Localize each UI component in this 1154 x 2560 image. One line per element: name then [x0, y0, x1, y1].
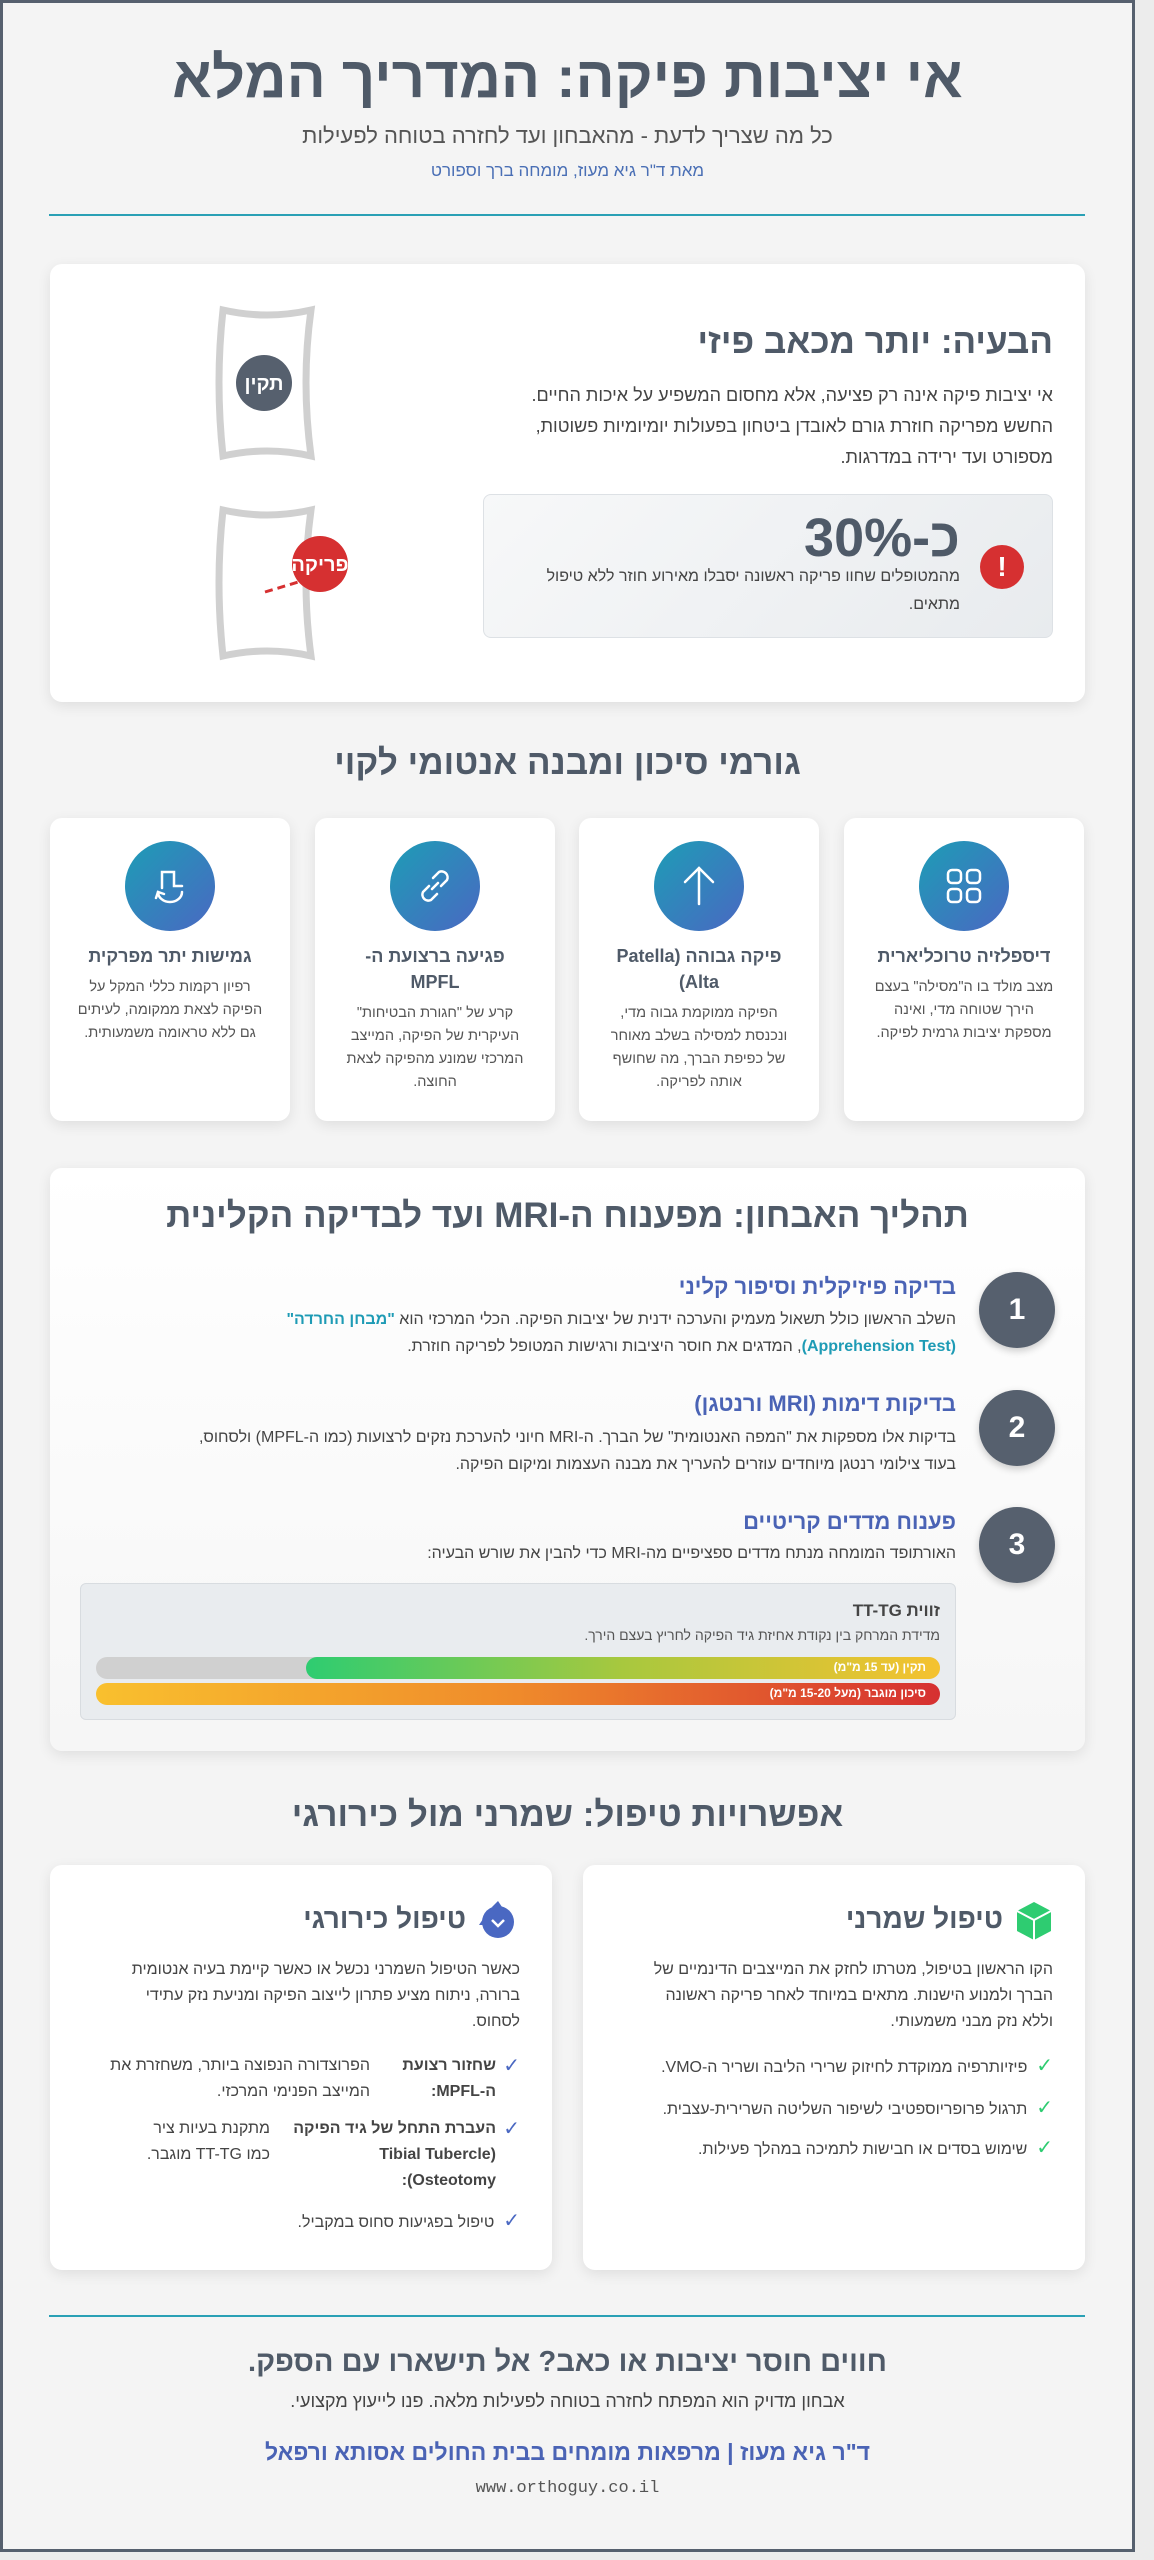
surgical text	[132, 1961, 520, 2030]
surgical list: Osteotomy):	[402, 2172, 496, 2189]
icon: arrow up	[654, 841, 744, 931]
CTA text: אבחון מדויק הוא המפתח לחזרה בטוחה לפעילות מלאה. פנו לייעוץ מקצועי.	[290, 2391, 845, 2411]
icon: green cube	[1017, 1902, 1051, 1940]
conservative heading: טיפול שמרני	[846, 1903, 1003, 1934]
panel: surgical	[50, 1865, 552, 2270]
problem text	[531, 385, 1053, 467]
step 3	[427, 1506, 1058, 1590]
surgical list: שחזור רצועת	[402, 2057, 496, 2074]
conservative text: הברך ולמנוע הישנות. מתאים במיוחד לאחר פריקה ראשונה	[666, 1987, 1053, 2004]
icon: blue badge	[479, 1901, 514, 1938]
surgical list: העברת התחל של גיד הפיקה	[293, 2120, 496, 2137]
stat description: מהמטופלים שחוו פריקה ראשונה יסבלו מאירוע חוזר ללא טיפול מתאים.	[547, 568, 960, 613]
surgical text: לסחוס.	[472, 2013, 520, 2030]
problem text: מספורט ועד ירידה במדרגות.	[840, 447, 1053, 467]
panel: patella alta: הפיקה ממוקמת גבוה מדי, ונכנסת למסילה בשלב מאוחר של כפיפת הברך, מה שחושף אותה לפריקה.	[611, 1005, 787, 1090]
panel: trochlear dysplasia: דיספלזיה טרוכליארית	[878, 946, 1050, 966]
bar: normal	[96, 1657, 940, 1679]
website: www.orthoguy.co.il	[476, 2479, 659, 2498]
checklist: ✓ תרגול פרופריוספטיבי לשיפור השליטה השרירית-עצבית.	[663, 2097, 1053, 2119]
panel: trochlear dysplasia	[844, 818, 1084, 1121]
icon: knee diagrams	[216, 306, 349, 660]
problem text: החשש מפריקה חוזרת גורם לאובדן ביטחון בפעולות יומיומיות פשוטות,	[536, 416, 1053, 436]
problem heading: הבעיה: יותר מכאב פיזי	[697, 322, 1053, 361]
step 3 title: פענוח מדדים קריטיים	[743, 1509, 956, 1534]
subtitle: כל מה שצריך לדעת - מהאבחון ועד לחזרה בטוחה לפעילות	[302, 123, 833, 148]
surgical list: ✓	[503, 2118, 520, 2140]
panel: MPFL	[315, 818, 555, 1121]
step number 2: 2	[1009, 1411, 1025, 1444]
diagnosis heading: תהליך האבחון: מפענוח ה-MRI ועד לבדיקה הקלינית	[166, 1196, 969, 1235]
surgical text: כאשר הטיפול השמרני נכשל או כאשר קיימת בעיה אנטומית	[132, 1961, 520, 1978]
icon: alert	[980, 545, 1024, 589]
checklist: ✓ שימוש בסדים או חבישות לתמיכה במהלך פעילות.	[698, 2137, 1053, 2159]
step 1 text: השלב הראשון כולל תשאול מעמיק והערכה ידנית של יציבות הפיקה. הכלי המרכזי הוא "מבחן החרדה" (Apprehension Test), המדגים את חוסר היציבות ורגישות המטופל לפריקה חוזרת.	[286, 1311, 956, 1355]
surgical text: ברורה, ניתוח מציע פתרון לייצוב הפיקה ומניעת נזק עתידי	[146, 1987, 520, 2004]
step 2 title: בדיקות דימות (MRI ורנטגן)	[694, 1391, 956, 1416]
surgical list: ✓	[503, 2055, 520, 2077]
chart: TT-TG	[80, 1583, 956, 1720]
surgical list: (Tibial Tubercle	[379, 2146, 496, 2163]
panel: diagnosis	[50, 1168, 1085, 1751]
step 3 text: האורתופד המומחה מנתח מדדים ספציפיים מה-MRI כדי להבין את שורש הבעיה:	[427, 1545, 956, 1562]
stat number: כ-30%	[804, 508, 960, 568]
panel: hypermobility: רפיון רקמות כללי המקל על הפיקה לצאת ממקומה, לעיתים גם ללא טראומה משמעותית.	[78, 979, 262, 1041]
author line: מאת ד"ר גיא מעוז, מומחה ברך וספורט	[431, 161, 704, 180]
icon: grid	[919, 841, 1009, 931]
checklist: ✓ פיזיותרפיה ממוקדת לחיזוק שרירי הליבה ושריר ה-VMO.	[661, 2055, 1053, 2077]
icon: link	[390, 841, 480, 931]
conservative text: הקו הראשון בטיפול, מטרתו לחזק את המייצבים הדינמיים של	[654, 1961, 1053, 1978]
TT-TG label: זווית TT-TG	[853, 1601, 940, 1620]
step 1	[286, 1272, 1058, 1355]
panel: problem	[50, 264, 1085, 702]
checklist	[661, 2055, 1053, 2159]
surgical list: הפרוצדורה הנפוצה ביותר, משחזרת את	[110, 2057, 370, 2074]
heading: risk factors: גורמי סיכון ומבנה אנטומי לקוי	[334, 743, 801, 782]
panel: MPFL: פגיעה ברצועת ה-	[365, 946, 505, 966]
panel: hypermobility: גמישות יתר מפרקית	[88, 946, 252, 966]
icon: knee diagrams: פריקה	[291, 554, 349, 576]
problem text: אי יציבות פיקה אינה רק פציעה, אלא מחסום המשפיע על איכות החיים.	[531, 385, 1053, 405]
bar: normal: תקין (עד 15 מ"מ)	[834, 1660, 926, 1674]
stat callout	[483, 494, 1053, 638]
CTA heading: חווים חוסר יציבות או כאב? אל תישארו עם הספק.	[248, 2346, 887, 2378]
surgical list	[110, 2055, 520, 2232]
panel: MPFL: קרע של "חגורת הבטיחות" העיקרית של הפיקה, המייצב המרכזי שמונע מהפיקה לצאת החוצה.	[347, 1005, 523, 1090]
panel: MPFL: MPFL	[410, 972, 460, 992]
panel: trochlear dysplasia: מצב מולד בו ה"מסילה" בעצם הירך שטוחה מדי, ואינה מספקת יציבות גרמית לפיקה.	[875, 979, 1053, 1041]
step 1 title: בדיקה פיזיקלית וסיפור קליני	[679, 1274, 956, 1299]
surgical list: ✓ טיפול בפגיעות סחוס במקביל.	[298, 2210, 520, 2232]
step number 3	[979, 1507, 1055, 1583]
panel: patella alta	[579, 818, 819, 1121]
step 2	[199, 1390, 1058, 1473]
surgical list: ה-MPFL:	[431, 2083, 496, 2100]
surgical list: המייצב הפנימי המרכזי.	[217, 2083, 370, 2100]
heading: treatment: אפשרויות טיפול: שמרני מול כירורגי	[292, 1795, 843, 1834]
icon: knee diagrams: תקין	[244, 373, 284, 395]
contact line: ד"ר גיא מעוז | מרפאות מומחים בבית החולים אסותא ורפאל	[265, 2439, 870, 2465]
panel: conservative	[583, 1865, 1085, 2270]
surgical heading: טיפול כירורגי	[303, 1903, 466, 1934]
panel: patella alta: פיקה גבוהה (Patella	[616, 946, 782, 966]
step number 1: 1	[1009, 1293, 1025, 1326]
surgical list: מתקנת בעיות ציר	[153, 2120, 270, 2137]
step number 3: 3	[1009, 1528, 1025, 1561]
step number 1	[979, 1272, 1055, 1348]
bar: risk: סיכון מוגבר (מעל 15-20 מ"מ)	[770, 1686, 926, 1700]
bar: risk	[96, 1683, 940, 1705]
conservative text: וללא נזק מבני משמעותי.	[890, 2013, 1053, 2030]
panel: hypermobility	[50, 818, 290, 1121]
step 2 text: בדיקות אלו מספקות את "המפה האנטומית" של הברך. ה-MRI חיוני להערכת נזקים לרצועות (כמו ה-MPFL) ולסחוס, בעוד צילומי רנטגן מיוחדים עוזרים להעריך את מבנה העצמות ומיקום הפיקה.	[199, 1429, 956, 1473]
step number 2	[979, 1390, 1055, 1466]
icon: flex	[125, 841, 215, 931]
conservative text	[654, 1961, 1053, 2030]
TT-TG description: מדידת המרחק בין נקודת אחיזת גיד הפיקה לחריץ בעצם הירך.	[584, 1627, 940, 1643]
surgical list: כמו TT-TG מוגבר.	[147, 2146, 270, 2163]
title: אי יציבות פיקה: המדריך המלא	[172, 45, 963, 110]
icon: alert: !	[997, 551, 1007, 582]
panel: patella alta: Alta)	[679, 972, 719, 992]
